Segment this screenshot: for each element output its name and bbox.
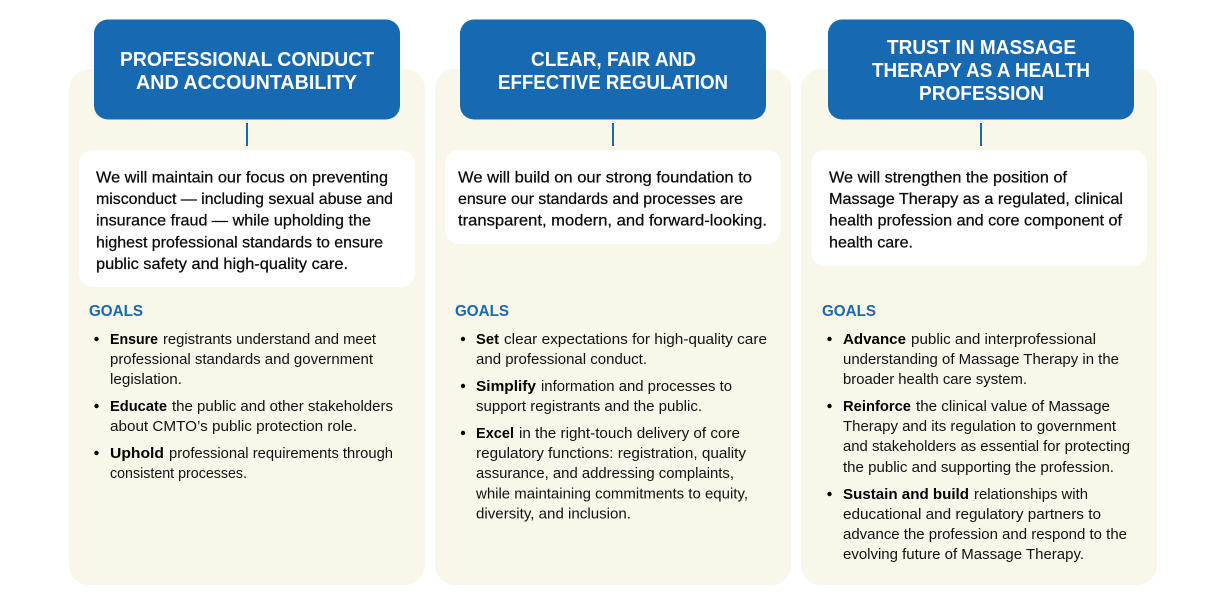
- goal: educate: about CMTO’s public protection role.: [110, 419, 357, 435]
- commitment card: We will maintain our focus on preventing: [96, 170, 388, 186]
- goal: ensure: professional standards and government: [110, 352, 373, 368]
- goal: uphold: Uphold: [110, 446, 164, 462]
- header: trust in massage therapy as a health profession: PROFESSION: [919, 83, 1044, 105]
- panel background: [435, 69, 791, 585]
- header: trust in massage therapy as a health profession: TRUST IN MASSAGE: [887, 37, 1076, 59]
- goal: reinforce: the clinical value of Massage: [916, 399, 1110, 415]
- panel background: [801, 69, 1157, 585]
- panel: professional conduct and accountability: [69, 20, 425, 585]
- goal: simplify: Simplify: [476, 379, 536, 395]
- goal: reinforce: the public and supporting the profession.: [843, 460, 1114, 476]
- goals list: [461, 332, 767, 522]
- commitment card: [445, 150, 781, 244]
- goal: ensure: Ensure: [110, 332, 158, 348]
- goal: set: Set: [476, 332, 499, 348]
- goal: educate: the public and other stakeholders: [172, 399, 393, 415]
- goal: simplify: [461, 379, 732, 415]
- goal: sustain and build: [827, 487, 1127, 563]
- goal: set: and professional conduct.: [476, 352, 647, 368]
- goal: advance: Advance: [843, 332, 906, 348]
- goal: ensure: legislation.: [110, 372, 182, 388]
- goal: excel: diversity, and inclusion.: [476, 506, 631, 522]
- connector line: [246, 123, 248, 146]
- goal: set: clear expectations for high-quality care: [504, 332, 767, 348]
- goal: excel: [461, 426, 748, 522]
- commitment card: public safety and high-quality care.: [96, 256, 348, 273]
- goals list: [94, 332, 393, 482]
- goal: advance: understanding of Massage Therapy in the: [843, 352, 1119, 368]
- goal: excel: Excel: [476, 426, 514, 442]
- goal: ensure: [94, 332, 376, 388]
- goal: advance: broader health care system.: [843, 372, 1027, 388]
- header: clear, fair and effective regulation: [460, 20, 766, 120]
- goal: sustain and build: Sustain and build: [843, 487, 969, 503]
- commitment card: [79, 150, 415, 287]
- connector line: [612, 123, 614, 146]
- goal: excel: while maintaining commitments to equity,: [475, 486, 748, 502]
- goal: excel: assurance, and addressing complaints,: [476, 466, 734, 482]
- header: professional conduct and accountability: AND ACCOUNTABILITY: [136, 72, 358, 94]
- commitment card: health care.: [829, 234, 913, 252]
- goals heading: GOALS: [455, 303, 509, 320]
- goal: reinforce: and stakeholders as essential for protecting: [843, 439, 1130, 455]
- goal: sustain and build: educational and regulatory partners to: [843, 507, 1101, 523]
- connector line: [980, 123, 982, 146]
- commitment card: Massage Therapy as a regulated, clinical: [829, 191, 1123, 208]
- goal: advance: [827, 332, 1119, 388]
- goal: advance: public and interprofessional: [911, 332, 1096, 348]
- goal: simplify: information and processes to: [541, 379, 732, 395]
- commitment card: We will strengthen the position of: [829, 170, 1068, 186]
- goal: uphold: [94, 446, 393, 482]
- goal: educate: Educate: [110, 399, 167, 415]
- commitment card: highest professional standards to ensure: [96, 234, 383, 252]
- goal: uphold: professional requirements through: [169, 446, 393, 462]
- goals list: [827, 332, 1130, 563]
- goal: ensure: registrants understand and meet: [163, 332, 376, 348]
- header: clear, fair and effective regulation: EFFECTIVE REGULATION: [498, 72, 728, 94]
- header: clear, fair and effective regulation: CLEAR, FAIR AND: [531, 49, 696, 71]
- goal: educate: [94, 399, 393, 435]
- panel background: [69, 69, 425, 585]
- goal: reinforce: [827, 399, 1130, 476]
- commitment card: ensure our standards and processes are: [458, 191, 743, 208]
- goal: uphold: consistent processes.: [110, 466, 247, 482]
- goal: reinforce: Reinforce: [843, 399, 911, 415]
- commitment card: [811, 150, 1147, 266]
- header: trust in massage therapy as a health profession: THERAPY AS A HEALTH: [872, 60, 1090, 82]
- header: professional conduct and accountability: [94, 20, 400, 120]
- panel: clear, fair and effective regulation: [435, 20, 791, 585]
- goal: excel: in the right-touch delivery of core: [519, 426, 740, 442]
- goal: sustain and build: evolving future of Massage Therapy.: [843, 547, 1084, 563]
- commitment card: misconduct — including sexual abuse and: [96, 191, 393, 208]
- commitment card: We will build on our strong foundation to: [458, 170, 752, 186]
- goal: reinforce: Therapy and its regulation to government: [843, 419, 1116, 435]
- header: professional conduct and accountability: PROFESSIONAL CONDUCT: [120, 49, 374, 71]
- goals heading: GOALS: [89, 303, 143, 320]
- goal: sustain and build: relationships with: [974, 487, 1088, 503]
- commitment card: health profession and core component of: [829, 212, 1123, 230]
- goal: excel: regulatory functions: registration, quality: [476, 446, 747, 462]
- goal: simplify: support registrants and the public.: [476, 399, 702, 415]
- commitment card: insurance fraud — while upholding the: [96, 212, 371, 230]
- goal: sustain and build: advance the profession and respond to the: [843, 527, 1127, 543]
- header: trust in massage therapy as a health profession: [828, 20, 1134, 120]
- commitment card: transparent, modern, and forward-looking.: [458, 212, 767, 230]
- goal: set: [461, 332, 767, 368]
- goals heading: GOALS: [822, 303, 876, 320]
- panel: trust in massage therapy as a health profession: [801, 20, 1157, 585]
